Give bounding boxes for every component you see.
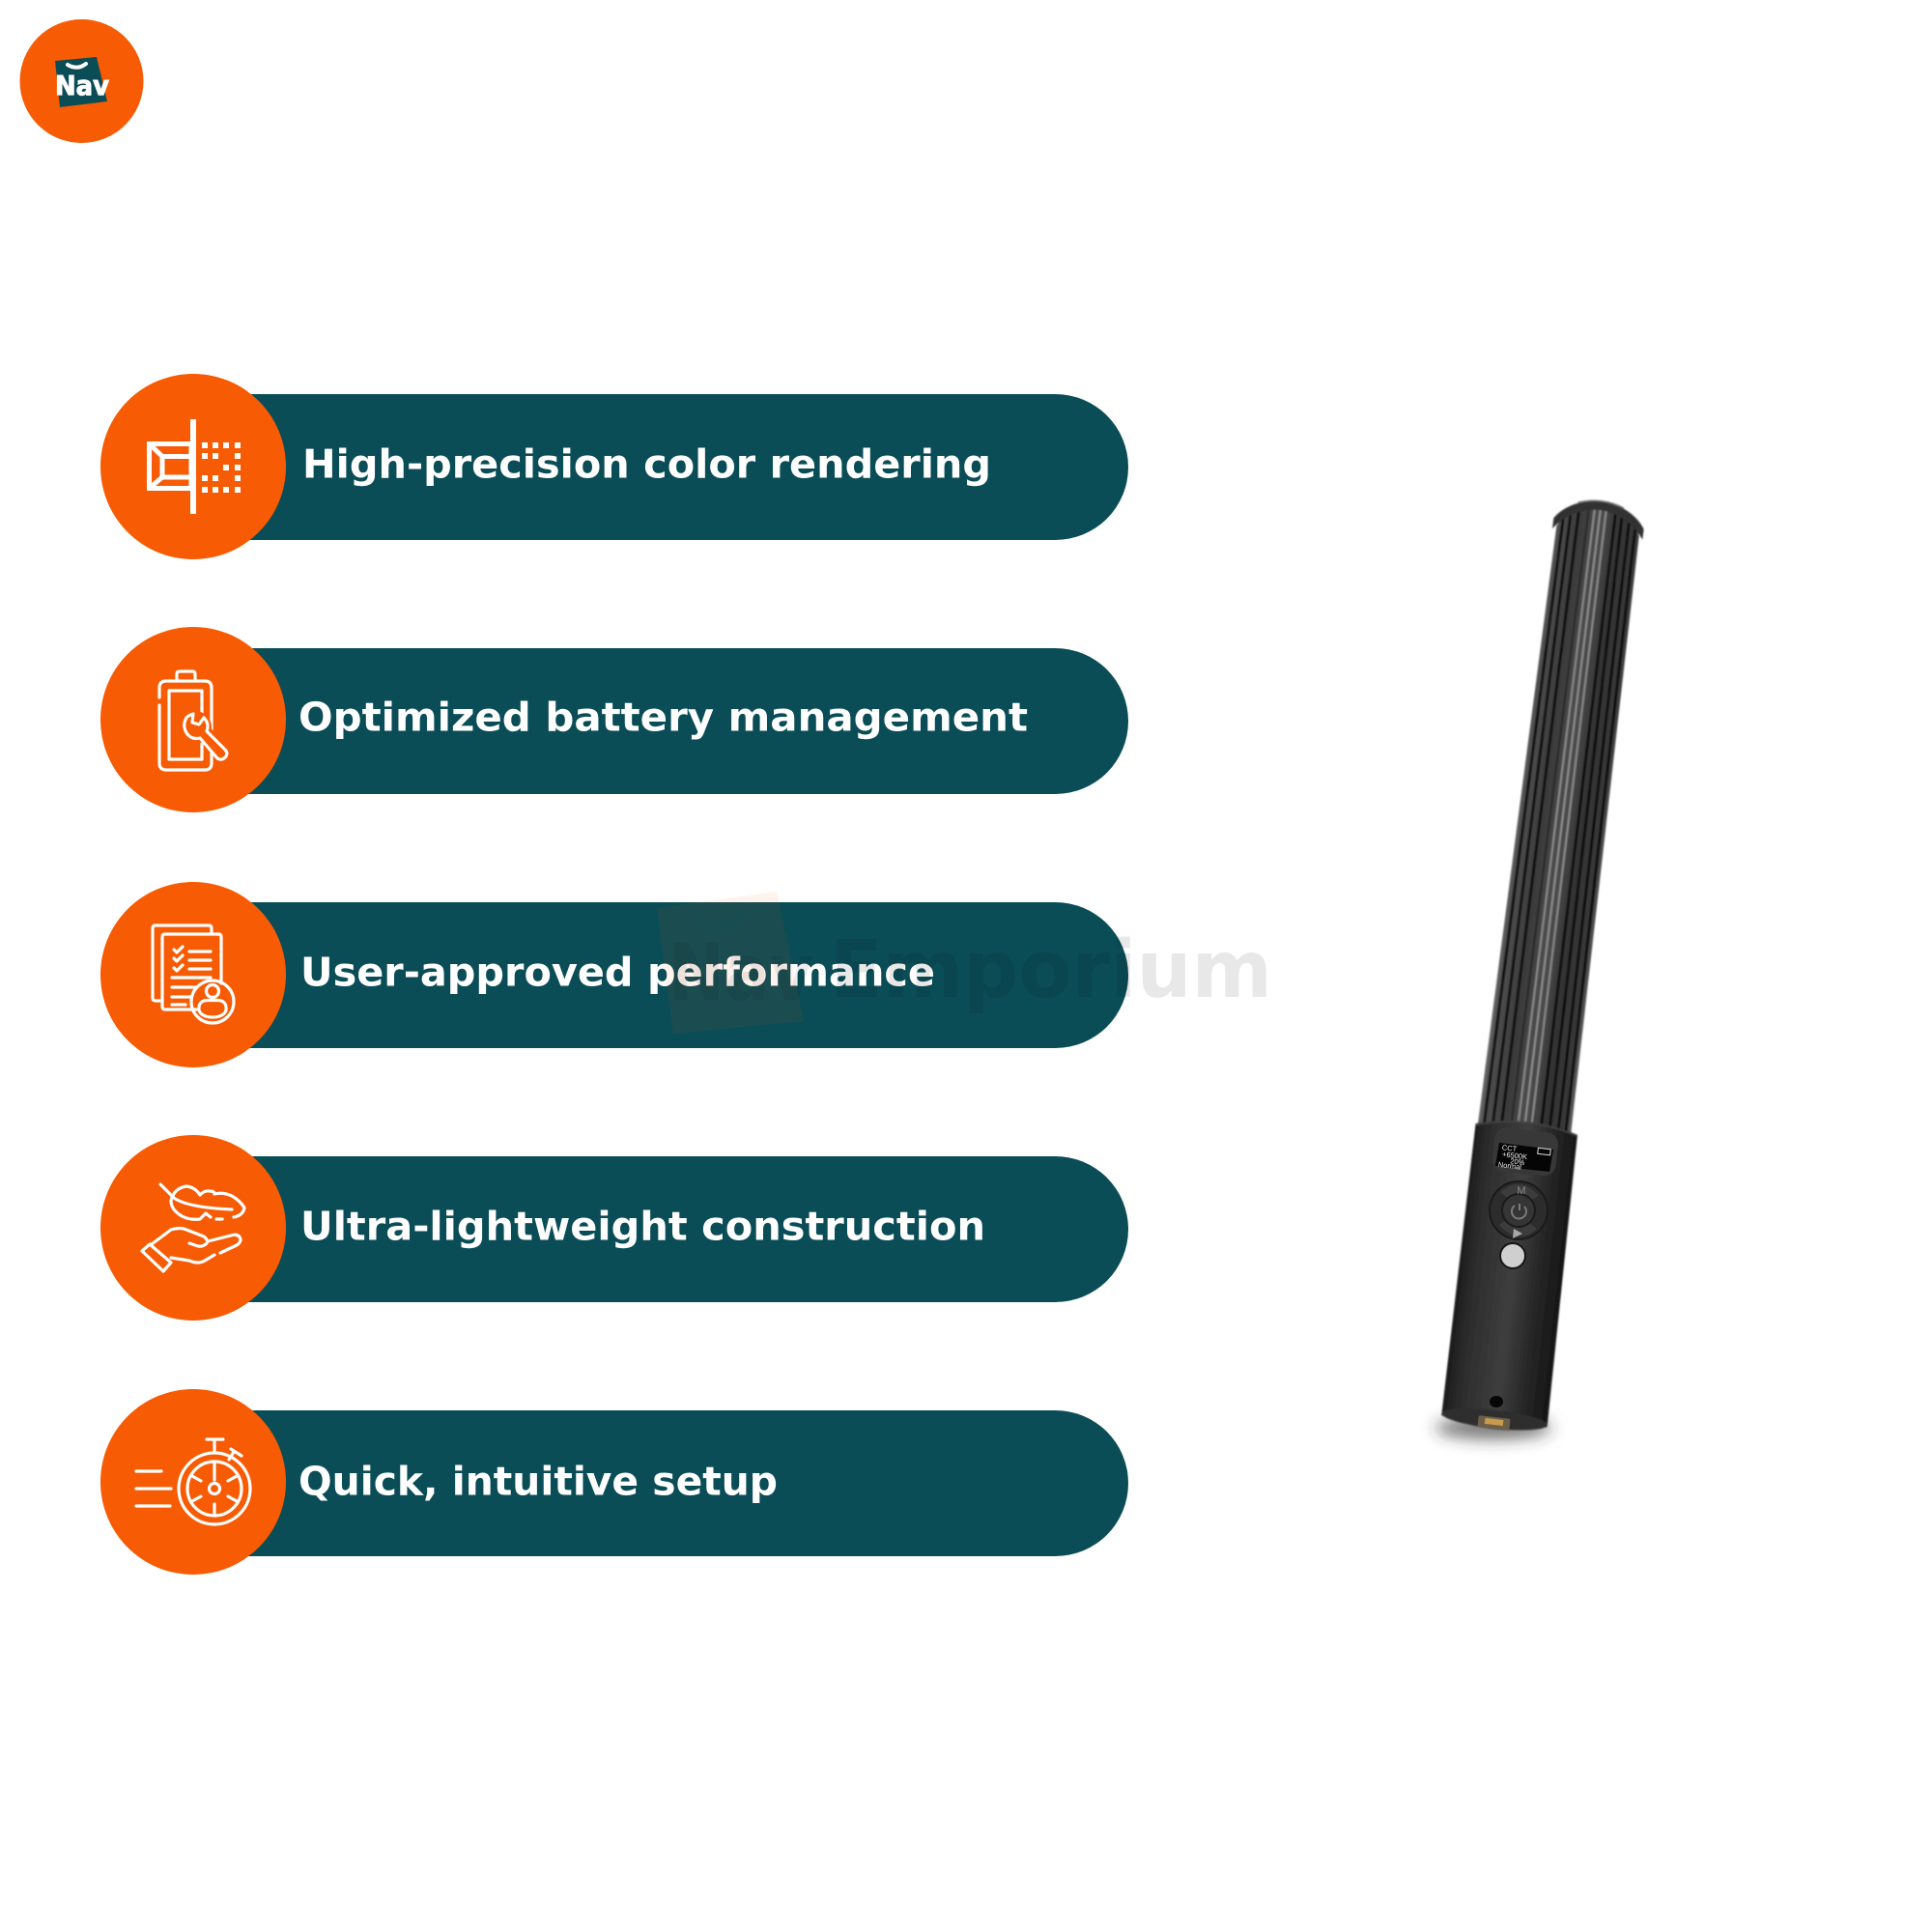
- control dial: [1490, 1181, 1548, 1239]
- feature row: battery management: [100, 627, 1128, 812]
- feature row: user approved: [100, 882, 1128, 1067]
- handle base: [1440, 1405, 1548, 1435]
- watermark: Emporium: [830, 924, 1272, 1016]
- icon: battery with wrench: [159, 671, 227, 770]
- display screen: CCT: [1501, 1143, 1518, 1153]
- feature row: quick setup: [100, 1389, 1128, 1575]
- display screen: 20%: [1510, 1156, 1525, 1167]
- display screen: +6500K: [1502, 1150, 1528, 1161]
- icon: stopwatch: [136, 1439, 250, 1524]
- product photo: LED light wand: [1435, 496, 1648, 1439]
- ground shadow: [1435, 1416, 1551, 1439]
- logo badge: [19, 19, 143, 143]
- label: User-approved performance: [300, 949, 935, 995]
- gold connector: [1477, 1415, 1511, 1431]
- label: Quick, intuitive setup: [298, 1459, 778, 1505]
- icon: document with user: [153, 925, 234, 1023]
- icon: feather over hand: [142, 1184, 244, 1271]
- display bezel: [1492, 1126, 1559, 1178]
- handle collar rim: [1476, 1117, 1577, 1136]
- control dial: M: [1517, 1185, 1526, 1197]
- icon: color filter: [149, 419, 241, 514]
- display screen: [1495, 1143, 1553, 1172]
- watermark: Nav: [668, 927, 813, 1019]
- ribbed light tube: [1478, 497, 1648, 1136]
- port: [1490, 1396, 1503, 1407]
- label: Ultra-lightweight construction: [300, 1204, 985, 1250]
- watermark: [657, 892, 1272, 1034]
- label: High-precision color rendering: [302, 440, 991, 487]
- round white button: [1500, 1243, 1525, 1268]
- feature row: lightweight: [100, 1135, 1128, 1321]
- handle: [1440, 1116, 1580, 1435]
- feature row: color rendering: [100, 374, 1128, 559]
- label: Optimized battery management: [298, 694, 1028, 740]
- logo badge: Nav: [55, 70, 109, 101]
- display screen: Normal: [1497, 1160, 1522, 1172]
- top cap: [1552, 497, 1646, 540]
